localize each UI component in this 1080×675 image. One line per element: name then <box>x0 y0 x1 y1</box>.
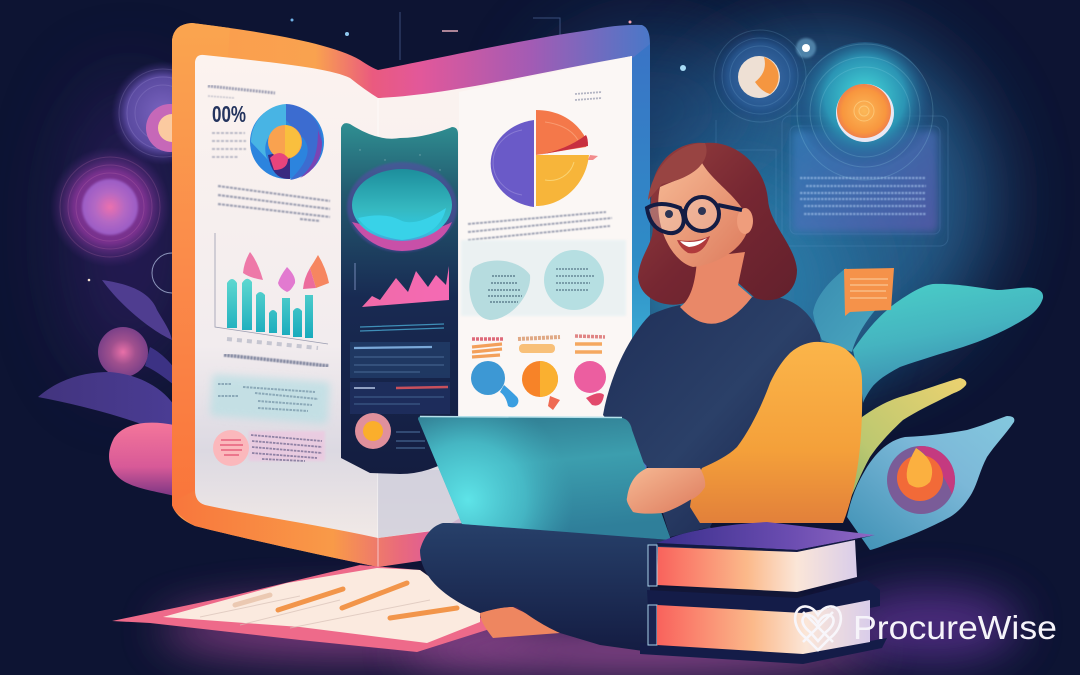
right leaves <box>813 268 1043 550</box>
orb: small moon <box>714 30 806 122</box>
book cover <box>172 23 650 567</box>
pie chart <box>491 110 598 207</box>
callout: teal note <box>210 374 330 424</box>
text block: right page <box>468 212 612 240</box>
callout: pink note <box>213 430 325 466</box>
yellow knee <box>690 342 862 523</box>
stat description <box>212 133 246 157</box>
panel: teal bubbles <box>461 240 626 320</box>
smile <box>677 236 710 253</box>
eyes <box>665 207 706 218</box>
dashboard rows <box>350 324 450 414</box>
hand <box>627 468 705 514</box>
woman <box>418 143 862 652</box>
leaf: yellow-green <box>830 378 966 523</box>
crossed legs <box>420 523 720 652</box>
book stack <box>640 522 887 664</box>
logo mark <box>795 606 841 650</box>
leaf eye <box>887 446 955 514</box>
gauge dot <box>355 413 391 449</box>
torso <box>603 296 821 537</box>
face <box>658 163 749 267</box>
orb: large purple <box>50 147 170 267</box>
open book <box>172 23 650 567</box>
text block: left page <box>218 186 330 221</box>
stat: percent: 00% <box>212 101 246 127</box>
page spread <box>195 55 632 538</box>
foot <box>480 607 560 638</box>
neck <box>680 252 752 324</box>
hair back <box>638 143 797 305</box>
right decorative panels <box>714 30 948 246</box>
paper on floor <box>112 565 493 652</box>
panel: three metrics <box>471 336 606 410</box>
donut chart <box>250 104 324 180</box>
orb: upper lilac <box>111 61 215 165</box>
logo wordmark: ProcureWise <box>853 610 1057 647</box>
left leaves <box>38 280 174 496</box>
star light <box>796 38 816 58</box>
logo: ProcureWise <box>795 606 1057 650</box>
panel: glowing note <box>792 130 938 232</box>
glasses <box>647 197 742 233</box>
panel frames <box>716 116 948 246</box>
hair fringe <box>648 143 707 200</box>
bar chart <box>215 233 329 344</box>
metric 1 <box>471 339 518 407</box>
chart caption <box>224 355 329 366</box>
orange sticky note <box>844 268 894 316</box>
blob: pink <box>109 423 174 496</box>
top book <box>647 522 880 622</box>
star dot <box>88 279 90 281</box>
area chart <box>355 263 449 307</box>
leaf: blue back <box>813 268 880 352</box>
orb: large sun <box>797 42 933 180</box>
metric 3 <box>574 336 606 406</box>
metric 2 <box>518 337 560 410</box>
leaf: blue lower <box>847 416 1014 550</box>
heading: left page <box>208 86 275 98</box>
ear <box>737 208 753 234</box>
leaf: teal upper <box>853 284 1043 403</box>
page shade <box>378 470 470 538</box>
panel: dark data column <box>341 123 458 474</box>
laptop <box>418 416 670 540</box>
left decorative orbs <box>50 61 215 293</box>
globe disc <box>347 162 457 252</box>
orb: magenta ball <box>98 327 148 377</box>
bottom book <box>640 600 887 664</box>
right page column <box>459 56 632 420</box>
chart axis labels <box>227 339 318 348</box>
